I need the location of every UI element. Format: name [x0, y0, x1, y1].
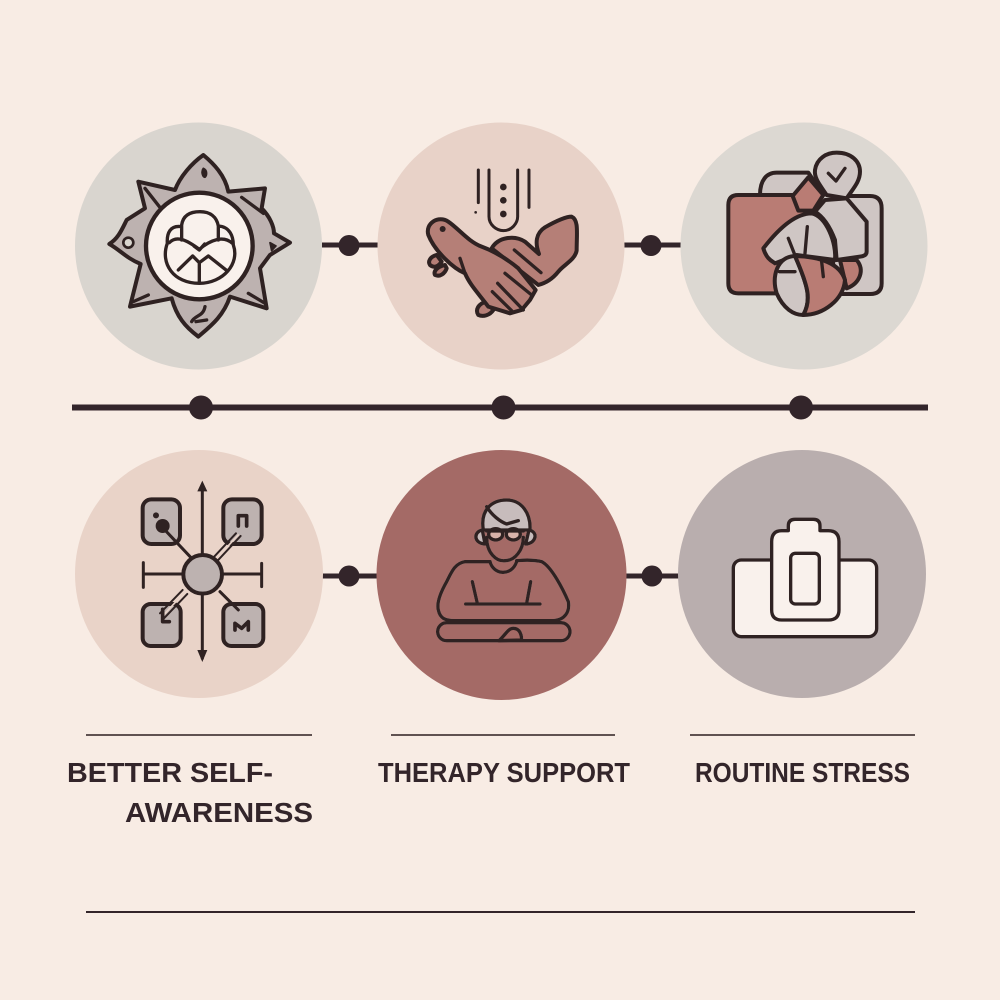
icon: battery on card	[733, 519, 877, 637]
connector: bottom right	[625, 566, 680, 586]
panel: folder and person icon badge	[680, 122, 928, 370]
connector: top right	[624, 235, 681, 256]
timeline: central axis	[72, 396, 928, 420]
label: better self-awareness	[67, 757, 313, 828]
label: better self-awareness: AWARENESS	[125, 797, 313, 828]
connector: bottom left	[322, 566, 379, 586]
rule: column three	[690, 734, 915, 736]
label: better self-awareness: BETTER SELF-	[67, 757, 273, 788]
label: routine stress: ROUTINE STRESS	[695, 757, 910, 788]
panel: lotus icon badge	[75, 122, 322, 370]
connector: top left	[322, 235, 379, 256]
icon: handshake	[428, 170, 577, 316]
panel: handshake icon badge	[378, 122, 624, 370]
panel: battery icon badge	[678, 450, 926, 698]
label: therapy support: THERAPY SUPPORT	[378, 757, 630, 788]
panel: mind map icon badge	[75, 450, 323, 698]
icon: folder with person and checkmark	[728, 153, 882, 315]
panel: therapist icon badge	[376, 450, 626, 700]
icon: therapist at desk	[438, 500, 570, 641]
rule: footer	[86, 911, 915, 913]
rule: column one	[86, 734, 312, 736]
rule: column two	[391, 734, 615, 736]
icon: lotus	[109, 155, 290, 337]
icon: central node with four squares	[143, 481, 263, 662]
